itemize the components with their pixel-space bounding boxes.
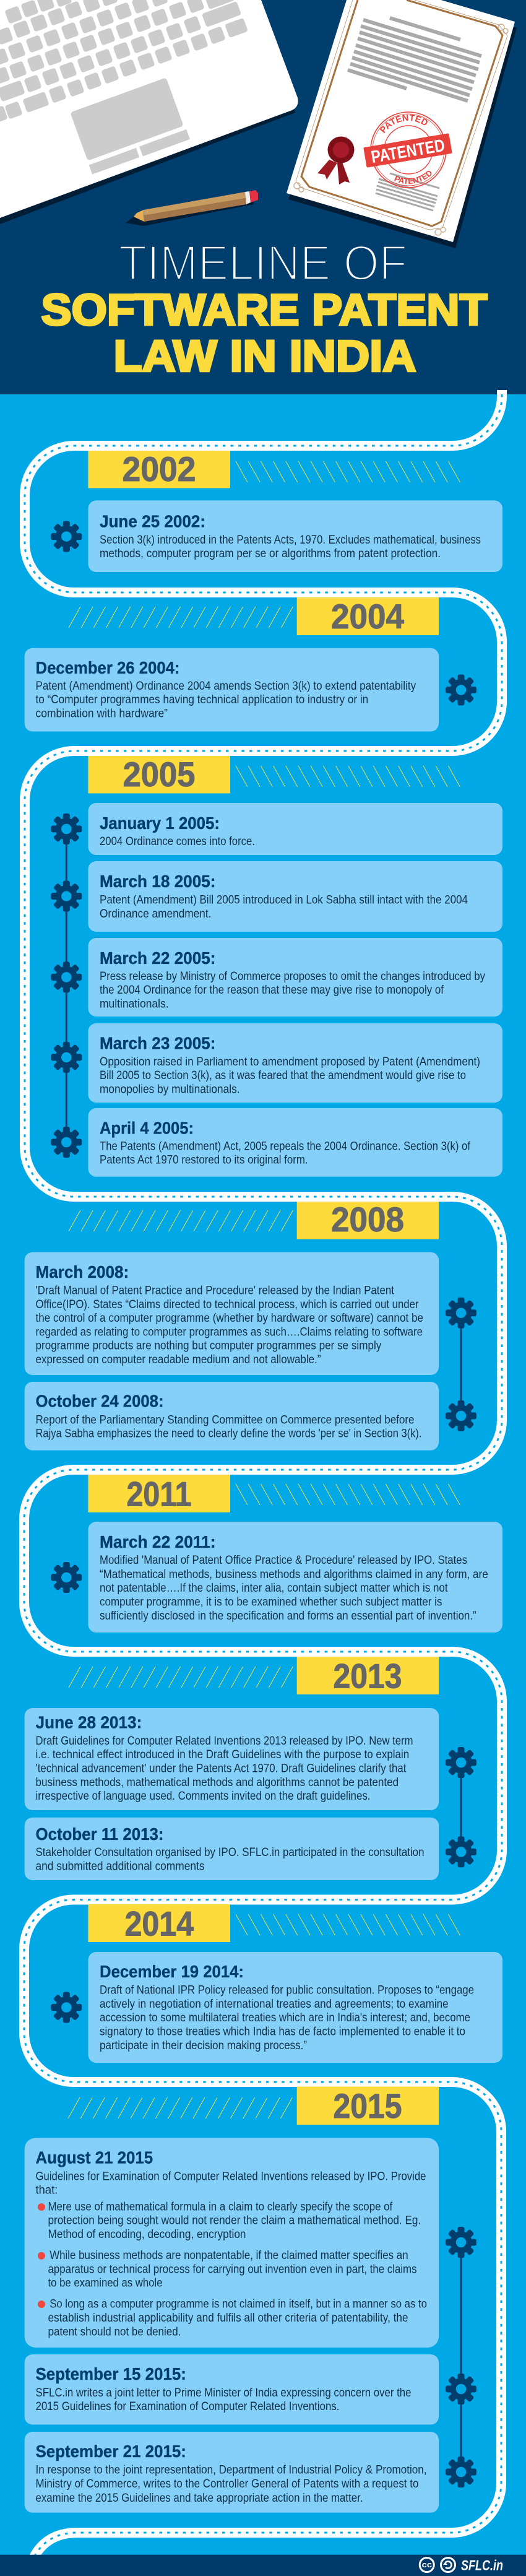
card: September 15 2015: SFLC.in writes a joint letter to Prime Minister of India expressing concern over the	[36, 2387, 411, 2400]
bullet: mathematical formula	[38, 2200, 421, 2241]
card: August 21 2015	[25, 2138, 439, 2348]
bullet: computer programme: So long as a computer programme is not claimed in itself, but in a manner so as to	[50, 2298, 427, 2311]
card: October 24 2008: October 24 2008:	[36, 1392, 163, 1411]
card: March 22 2011: sufficiently disclosed in the specification and forms an essential part of invention.”	[100, 1610, 476, 1623]
card: June 28 2013: i.e. technical effect introduced in the Draft Guidelines with the purpose to explain	[36, 1748, 409, 1761]
card: October 24 2008: Rajya Sabha emphasizes the need to clearly define the words 'per se' in Section 3(k).	[36, 1428, 422, 1441]
card: December 19 2014: December 19 2014:	[100, 1962, 244, 1981]
hatch decoration	[236, 1484, 460, 1505]
card: March 2008: Office(IPO). States “Claims directed to technical process, which is carried out under	[36, 1298, 419, 1311]
brand: SFLC.in: SFLC.in	[461, 2557, 503, 2574]
card: October 11 2013	[25, 1818, 439, 1880]
card: October 24 2008: Report of the Parliamentary Standing Committee on Commerce presented before	[36, 1413, 415, 1426]
section: 2011	[51, 1474, 502, 1633]
card: March 23 2005: Bill 2005 to Section 3(k), as it was feared that the amendment would give rise to	[100, 1069, 466, 1082]
section: 2005	[51, 755, 502, 1177]
card: December 26 2004: Patent (Amendment) Ordinance 2004 amends Section 3(k) to extend patentability	[36, 680, 416, 693]
footer bar	[0, 2555, 526, 2576]
card: March 22 2011: computer programme, it is to be examined whether such subject matter is	[100, 1596, 442, 1609]
card: December 19 2014: signatory to those treaties which India has de facto implemented to enable it to	[100, 2026, 465, 2039]
card: March 22 2005: the 2004 Ordinance for the reason that these may give rise to monopoly of	[100, 984, 444, 997]
card: March 23 2005: Opposition raised in Parliament to amendment proposed by Patent (Amendment)	[100, 1056, 480, 1069]
card: October 11 2013: and submitted additional comments	[36, 1860, 204, 1873]
bullet: mathematical formula: Method of encoding, decoding, encryption	[48, 2228, 246, 2241]
card: September 21 2015	[25, 2432, 439, 2513]
card: June 28 2013: Draft Guidelines for Computer Related Inventions 2013 released by IPO. New term	[36, 1735, 413, 1748]
year label 2004: 2004	[331, 597, 404, 636]
card: March 23 2005	[88, 1023, 502, 1103]
card: March 22 2011: Modified 'Manual of Patent Office Practice & Procedure' released by IPO. States	[100, 1554, 467, 1567]
bullet: mathematical formula: protection being sought would not render the claim a mathematical method. Eg.	[48, 2214, 421, 2227]
card: June 28 2013: June 28 2013:	[36, 1713, 142, 1732]
year label 2008: 2008	[331, 1200, 404, 1239]
section: 2004	[25, 597, 476, 732]
year label 2008	[297, 1200, 439, 1239]
card: June 25 2002: methods, computer program per se or algorithms from patent protection.	[100, 547, 441, 560]
card: March 2008: the control of a computer programme (whether by hardware or software) cannot be	[36, 1312, 423, 1325]
card: March 2008: March 2008:	[36, 1262, 129, 1281]
hatch decoration	[69, 607, 293, 628]
title	[41, 235, 488, 381]
card: December 19 2014: accession to some multilateral treaties which are in India's interest; and, become	[100, 2011, 470, 2024]
year label 2005: 2005	[123, 755, 196, 794]
card: March 18 2005	[88, 861, 502, 932]
card: September 15 2015	[25, 2354, 439, 2424]
icon: patented stamp: PATENTED	[369, 136, 446, 167]
card: June 28 2013: irrespective of language used. Comments invited on the draft guidelines.	[36, 1790, 370, 1803]
icon: copyleft	[441, 2558, 455, 2572]
icon: gear	[51, 1992, 82, 2023]
year label 2011	[88, 1474, 230, 1513]
section: 2008	[25, 1200, 476, 1451]
section: 2013	[25, 1656, 476, 1880]
card: April 4 2005: The Patents (Amendment) Act, 2005 repeals the 2004 Ordinance. Section 3(k) of	[100, 1140, 471, 1153]
year label 2015	[297, 2086, 439, 2125]
card: March 2008	[25, 1252, 439, 1375]
bullet: business methods: apparatus or technical process for carrying out invention even in part, the claims	[48, 2263, 417, 2276]
card: April 4 2005	[88, 1108, 502, 1177]
card: December 26 2004	[25, 648, 439, 732]
card: December 26 2004: to “Computer programmes having technical application to industry or in	[36, 693, 368, 706]
card: October 11 2013: October 11 2013:	[36, 1824, 163, 1844]
bullet: mathematical formula: Mere use of mathematical formula in a claim to clearly specify the scope of	[48, 2200, 393, 2213]
timeline connector with gears	[51, 813, 82, 1158]
icon: creative commons	[420, 2558, 434, 2572]
year label 2002: 2002	[123, 449, 196, 488]
icon: patented stamp: PATENTED	[394, 171, 432, 184]
timeline connector with gears	[446, 1747, 476, 1867]
card: December 26 2004: combination with hardware”	[36, 708, 168, 721]
section: 2014	[51, 1904, 502, 2063]
card: March 2008: 'Draft Manual of Patent Practice and Procedure' released by the Indian Patent	[36, 1284, 394, 1297]
bullet: business methods: to be examined as whole	[48, 2277, 162, 2290]
card: August 21 2015: August 21 2015	[36, 2148, 153, 2167]
section: 2015	[25, 2086, 476, 2513]
bullet: business methods: While business methods are nonpatentable, if the claimed matter specifies an	[50, 2249, 408, 2262]
hatch decoration	[69, 1210, 293, 1231]
card: June 25 2002: June 25 2002:	[100, 512, 205, 531]
card: March 22 2005: March 22 2005:	[100, 948, 215, 968]
header panel	[0, 0, 526, 394]
card: March 2008: expressed on computer readable medium and not allowable.”	[36, 1353, 321, 1366]
title: TIMELINE OF	[119, 235, 407, 290]
card: October 11 2013: Stakeholder Consultation organised by IPO. SFLC.in participated in the consultation	[36, 1846, 425, 1859]
card: March 23 2005: monopolies by multinationals.	[100, 1083, 240, 1096]
hatch decoration	[69, 1667, 293, 1688]
card: August 21 2015: that:	[36, 2184, 58, 2197]
year label 2002	[88, 449, 230, 488]
icon: patented stamp	[364, 111, 452, 188]
card: March 23 2005: March 23 2005:	[100, 1034, 215, 1052]
bullet: business methods	[38, 2249, 417, 2290]
icon: wax seal	[317, 136, 354, 184]
timeline connector with gears	[446, 1298, 476, 1431]
icon: gear	[446, 675, 476, 706]
card: June 28 2013: 'technical advancement' under the Patents Act 1970. Draft Guidelines clarify that	[36, 1762, 407, 1776]
card: March 18 2005: Ordinance amendment.	[100, 908, 212, 921]
year label 2004	[297, 597, 439, 636]
card: August 21 2015: Guidelines for Examination of Computer Related Inventions released by IPO. Provide	[36, 2170, 426, 2183]
card: March 2008: regarded as relating to computer programmes as such….Claims relating to software	[36, 1325, 423, 1338]
bullet: computer programme: patent should not be denied.	[48, 2325, 181, 2338]
card: April 4 2005: April 4 2005:	[100, 1118, 194, 1138]
card: March 18 2005: Patent (Amendment) Bill 2005 introduced in Lok Sabha still intact with the 2004	[100, 894, 468, 907]
card: April 4 2005: Patents Act 1970 restored to its original form.	[100, 1154, 308, 1167]
card: September 21 2015: Ministry of Commerce, writes to the Controller General of Patents with a request to	[36, 2478, 418, 2491]
year label 2011: 2011	[126, 1474, 192, 1513]
hatch decoration	[236, 766, 460, 787]
card: December 19 2014: participate in their decision making process.”	[100, 2039, 307, 2052]
bullet: computer programme	[38, 2298, 427, 2338]
timeline connector with gears	[446, 2227, 476, 2487]
hatch decoration	[68, 2097, 292, 2118]
card: December 19 2014: Draft of National IPR Policy released for public consultation. Proposes to “engage	[100, 1984, 474, 1997]
icon: gear	[51, 1562, 82, 1593]
card: March 22 2005	[88, 938, 502, 1017]
card: October 24 2008	[25, 1382, 439, 1451]
year label 2005	[88, 755, 230, 794]
card: September 21 2015: examine the 2015 Guidelines and take appropriate action in the matter.	[36, 2492, 363, 2505]
year label 2014	[88, 1904, 230, 1943]
hatch decoration	[236, 1914, 460, 1935]
icon: patent certificate	[287, 0, 517, 248]
card: January 1 2005: January 1 2005:	[100, 813, 220, 833]
year label 2015: 2015	[333, 2086, 402, 2125]
bullet: computer programme: establish industrial applicability and fulfils all other criteria of patentability, the	[48, 2312, 408, 2325]
card: December 26 2004: December 26 2004:	[36, 658, 179, 677]
card: September 21 2015: September 21 2015:	[36, 2442, 186, 2461]
card: March 22 2011	[88, 1522, 502, 1633]
title: LAW IN INDIA	[114, 332, 416, 381]
card: March 22 2011: March 22 2011:	[100, 1532, 215, 1551]
card: June 28 2013	[25, 1708, 439, 1810]
card: March 22 2005: multinationals.	[100, 998, 169, 1010]
card: March 22 2011: not patentable….If the claims, inter alia, contain subject matter which is not	[100, 1582, 448, 1595]
icon: gear	[51, 521, 82, 552]
card: September 21 2015: In response to the joint representation, Department of Industrial Policy & Promotion,	[36, 2464, 427, 2477]
card: September 15 2015: 2015 Guidelines for Examination of Computer Related Inventions.	[36, 2400, 339, 2413]
card: March 2008: programme products are nothing but computer programmes per se simply	[36, 1340, 382, 1353]
section: 2002	[51, 449, 502, 572]
year label 2013: 2013	[333, 1656, 402, 1695]
card: December 19 2014	[88, 1952, 502, 2063]
icon: pencil	[126, 190, 258, 226]
card: June 28 2013: business methods, mathematical methods and algorithms cannot be patented	[36, 1776, 399, 1789]
icon: creative commons: cc	[422, 2560, 432, 2569]
card: March 22 2011: “Mathematical methods, business methods and algorithms claimed in any form, are	[100, 1568, 488, 1581]
card: January 1 2005	[88, 803, 502, 855]
card: September 15 2015: September 15 2015:	[36, 2364, 186, 2383]
hatch decoration	[236, 461, 460, 482]
icon: laptop	[0, 0, 298, 224]
card: January 1 2005: 2004 Ordinance comes into force.	[100, 835, 255, 848]
title: SOFTWARE PATENT	[41, 286, 488, 335]
icon: patented stamp: PATENTED	[380, 114, 428, 134]
card: June 25 2002	[88, 500, 502, 572]
winding road timeline	[24, 390, 502, 2558]
year label 2013	[297, 1656, 439, 1695]
card: December 19 2014: actively in negotiation of international treaties and agreements; to examine	[100, 1998, 449, 2011]
card: March 18 2005: March 18 2005:	[100, 872, 215, 891]
year label 2014: 2014	[125, 1904, 194, 1943]
